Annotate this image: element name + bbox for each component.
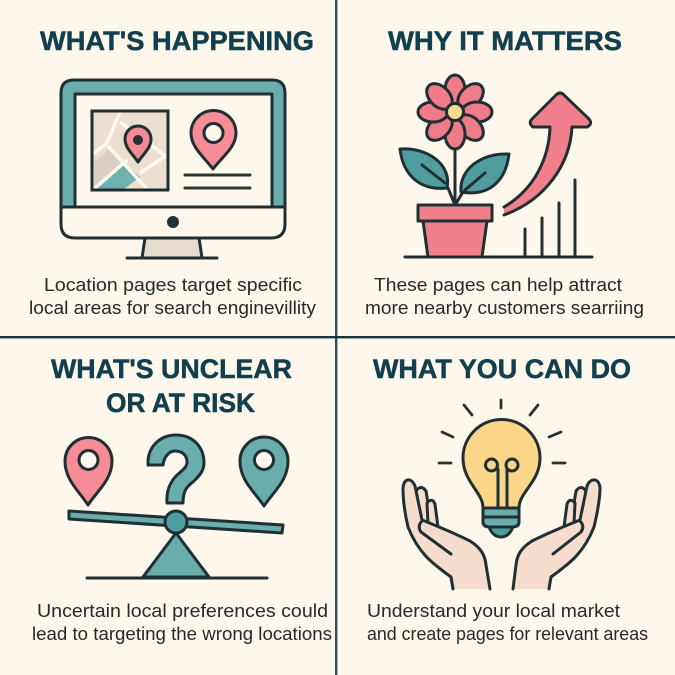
icon: teal location pin xyxy=(240,437,288,506)
heading: what's unclear or at risk: WHAT'S UNCLEAR xyxy=(51,354,292,384)
icon: left open hand xyxy=(403,480,490,589)
panel: what's unclear xyxy=(32,354,332,644)
icon: right open hand xyxy=(513,480,600,589)
panel: what you can do xyxy=(367,354,648,644)
text: what you can do: Understand your local market xyxy=(367,601,620,621)
icon: balance scale xyxy=(69,511,283,578)
text: what's happening xyxy=(29,275,316,318)
icon: desktop monitor with map and location pin xyxy=(61,80,285,258)
text: what's happening: Location pages target specific xyxy=(44,275,302,295)
icon: rising arrow xyxy=(504,93,591,215)
heading: what you can do: WHAT YOU CAN DO xyxy=(373,354,631,384)
panel: why it matters xyxy=(365,26,644,318)
text: what's unclear: Uncertain local preferences could xyxy=(37,601,328,621)
text: what's unclear: lead to targeting the wrong locations xyxy=(32,624,332,644)
panel: what's happening xyxy=(29,26,316,318)
icon: light bulb with rays xyxy=(439,400,565,537)
text: why it matters: These pages can help attract xyxy=(374,275,622,295)
heading: what's unclear or at risk: OR AT RISK xyxy=(106,388,255,418)
text: why it matters: more nearby customers searriing xyxy=(365,298,644,318)
icon: flower in a pot xyxy=(400,75,509,257)
location pin xyxy=(191,111,236,169)
text: what's unclear xyxy=(32,601,332,644)
heading: why it matters: WHY IT MATTERS xyxy=(388,26,622,56)
text: why it matters xyxy=(365,275,644,318)
text: what's happening: local areas for search enginevillity xyxy=(29,298,316,318)
icon: question mark xyxy=(148,435,204,503)
map xyxy=(91,110,169,191)
text: what you can do xyxy=(367,601,648,644)
bar chart xyxy=(405,180,592,257)
heading: what's unclear or at risk xyxy=(51,354,292,418)
heading: what's happening: WHAT'S HAPPENING xyxy=(40,26,314,56)
icon: pink location pin xyxy=(65,438,112,505)
text: what you can do: and create pages for relevant areas xyxy=(367,624,648,644)
